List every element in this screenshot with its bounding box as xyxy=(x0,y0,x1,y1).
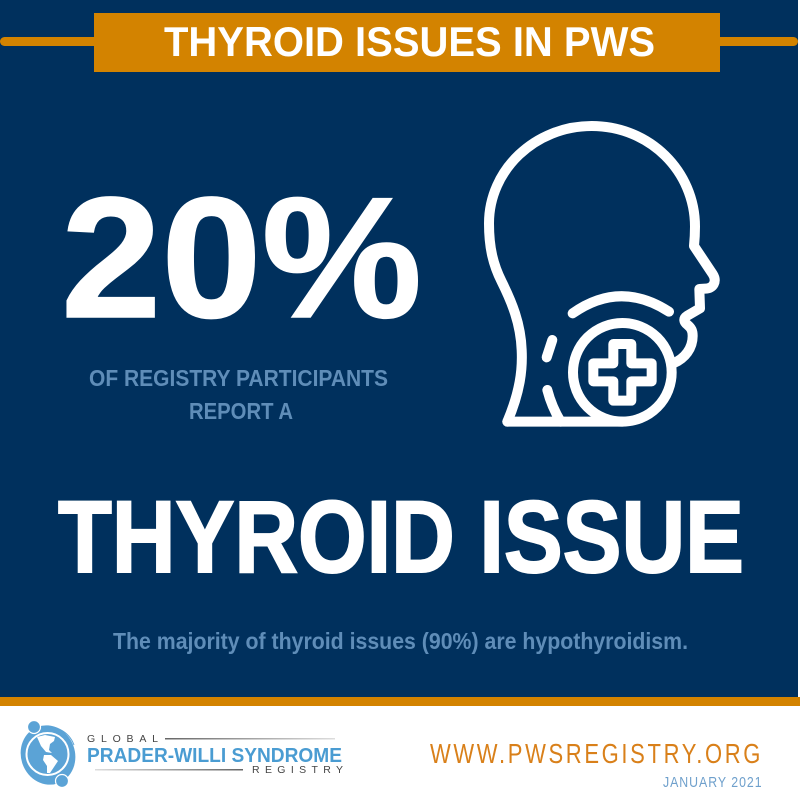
title banner xyxy=(0,13,798,72)
big statistic: 20%: 20% xyxy=(61,162,422,354)
logo text: prader-willi syndrome: PRADER-WILLI SYNDROME xyxy=(87,744,342,767)
text block: of registry participants report a: OF REGISTRY PARTICIPANTS xyxy=(89,365,388,391)
logo rule: lower xyxy=(95,769,243,770)
title text: THYROID ISSUES IN PWS xyxy=(164,18,655,65)
icon: globe with two figures xyxy=(12,718,84,792)
text block: of registry participants report a xyxy=(89,365,388,424)
logo rule: upper xyxy=(165,738,335,740)
logo text: global: GLOBAL xyxy=(87,733,158,745)
date: JANUARY 2021 xyxy=(663,774,762,790)
website url: WWW.PWSREGISTRY.ORG xyxy=(430,739,760,770)
logo: global prader-willi syndrome registry xyxy=(12,718,343,792)
divider: orange band xyxy=(0,697,800,706)
text block: majority note: The majority of thyroid issues (90%) are hypothyroidism. xyxy=(113,628,688,654)
logo text: registry: REGISTRY xyxy=(252,764,343,776)
text block: of registry participants report a: REPORT A xyxy=(189,398,293,424)
icon: head profile with thyroid cross xyxy=(489,126,715,422)
